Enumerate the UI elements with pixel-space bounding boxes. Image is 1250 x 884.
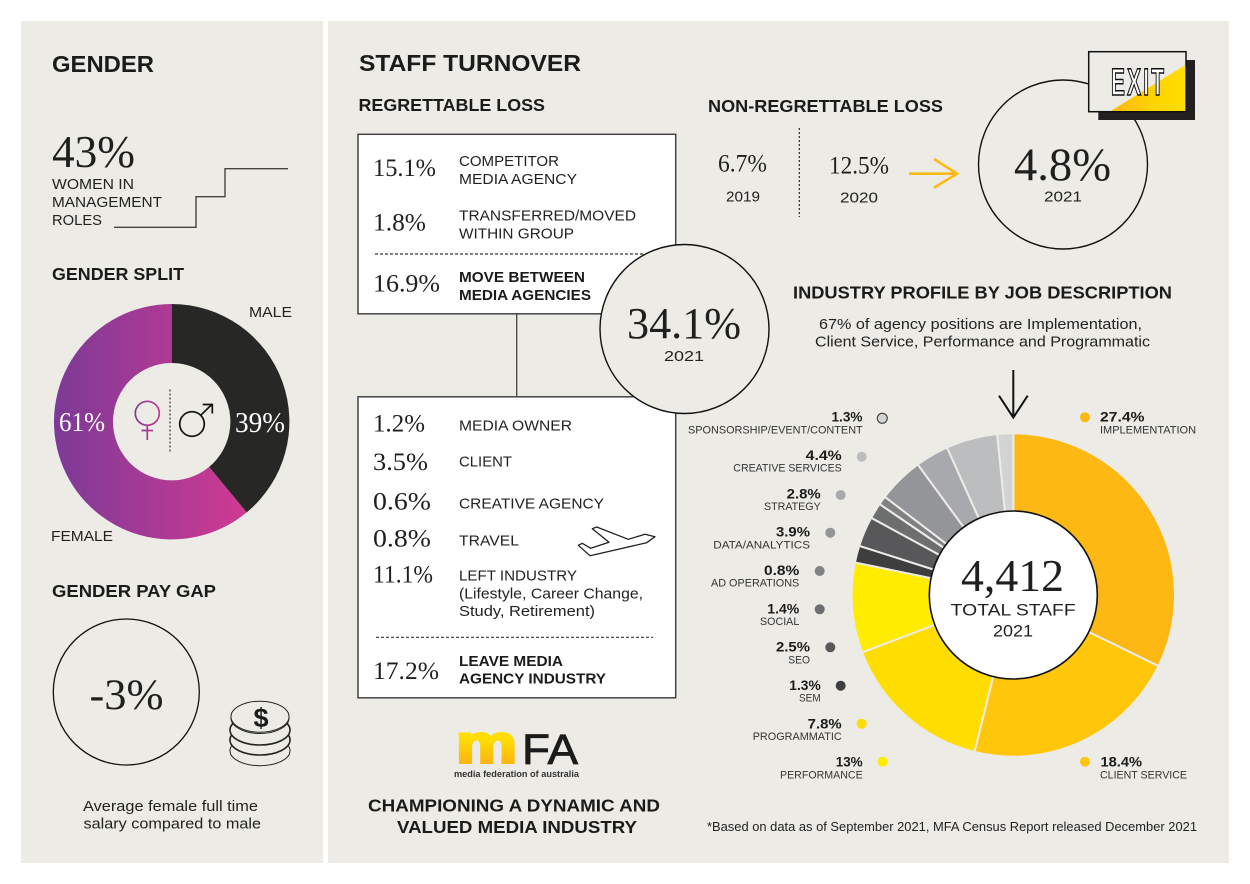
slice: strategy [918,448,1013,595]
stat: women in management: ROLES [52,212,102,229]
slice: ad operations [880,497,1013,595]
stat circle: 34.1% 2021: 2021 [664,348,704,365]
box: leave media agency industry: 0.8% [373,526,431,553]
legend: social: SOCIAL [760,616,799,628]
text: industry profile description [815,316,1151,350]
icon: exit sign: EXIT [1111,62,1166,104]
slice: programmatic [862,595,1013,752]
box: leave media agency industry: 1.2% [373,410,425,438]
slice: female 61% [54,304,247,539]
box: leave media agency industry: (Lifestyle, Career Change, [459,586,643,603]
icon: exit sign [1089,52,1195,120]
legend: social: 1.4% [767,600,800,616]
legend: ad operations: AD OPERATIONS [711,578,799,590]
legend: seo: SEO [788,654,810,666]
stat: 2020: 12.5% [829,152,889,179]
slice: seo [859,518,1013,595]
box: leave media agency industry: LEAVE MEDIA [459,653,563,670]
box: moves between agencies: COMPETITOR [459,153,559,170]
box: moves between agencies: WITHIN GROUP [459,226,574,242]
footnote: *Based on data as of September 2021, MFA Census Report released December 2021 [707,820,1197,834]
stat: women in management: MANAGEMENT [52,194,162,211]
legend: client service: 18.4% [1100,754,1143,770]
heading: gender pay gap: GENDER PAY GAP [52,581,216,601]
legend: sponsorship: 1.3% [832,409,863,425]
stat circle: 34.1% 2021: 34.1% [627,299,741,348]
logo: media federation of australia: m [456,714,517,774]
icon: rising steps line [114,169,288,227]
legend: seo [776,639,835,666]
stat: women in management [52,126,162,229]
panel: gender [21,21,323,863]
text: pay gap description: salary compared to male [84,816,261,832]
text: industry profile description: Client Service, Performance and Programmatic [815,334,1151,350]
stat: 2019: 2019 [726,189,760,206]
box: leave media agency industry: CREATIVE AGENCY [459,495,604,512]
legend: ad operations: 0.8% [764,562,800,578]
box: leave media agency industry: CLIENT [459,454,512,471]
donut chart: gender split [54,304,289,539]
donut chart: job description [852,433,1175,757]
legend: data and analytics: 3.9% [776,524,811,540]
box: moves between agencies: 16.9% [373,270,440,298]
legend: implementation: IMPLEMENTATION [1100,424,1196,436]
slice: creative services [947,434,1013,595]
heading: staff turnover: STAFF TURNOVER [359,50,581,76]
legend: creative services [733,447,867,475]
stat: women in management: WOMEN IN [52,176,134,193]
box: leave media agency industry: LEFT INDUSTRY [459,568,577,585]
stat: women in management: 43% [52,126,135,177]
box: moves between agencies: MEDIA AGENCIES [459,287,591,304]
legend: seo: 2.5% [776,639,811,655]
stat circle: 34.1% 2021 [600,244,769,414]
legend: implementation [1080,409,1196,436]
stat: 2020: 2020 [840,190,878,207]
legend: ad operations [711,562,825,590]
arrow: to 2021 [909,159,957,188]
box: leave media agency industry: AGENCY INDUSTRY [459,670,606,688]
stat: 2019: 6.7% [718,150,767,178]
text: industry profile description: 67% of agency positions are Implementation, [819,316,1142,333]
legend: performance: PERFORMANCE [780,769,863,781]
text: pay gap description [83,798,261,832]
legend: client service [1080,754,1187,781]
chart centre: total staff: 2021 [993,622,1033,641]
slice: male 39% [172,304,289,512]
legend: sponsorship: SPONSORSHIP/EVENT/CONTENT [688,424,863,436]
icon: female symbol [135,401,159,440]
box: moves between agencies: 15.1% [373,155,436,182]
legend: data and analytics [713,524,835,551]
box: moves between agencies: TRANSFERRED/MOVED [459,208,636,224]
box: moves between agencies [358,134,676,314]
legend: sem [789,677,846,705]
heading: regrettable loss: REGRETTABLE LOSS [358,95,545,115]
box: leave media agency industry: MEDIA OWNER [459,418,572,435]
slice: sem [855,546,1013,595]
box: moves between agencies: MEDIA AGENCY [459,171,577,188]
heading: non-regrettable loss: NON-REGRETTABLE LOSS [708,96,943,116]
legend: sem: SEM [799,693,821,705]
stat: 2019 [718,150,767,206]
legend: data and analytics: DATA/ANALYTICS [713,539,810,551]
box: leave media agency industry: 11.1% [373,562,433,588]
legend: sponsorship [688,409,887,436]
icon: male symbol [180,404,212,436]
label: male: MALE [249,304,292,321]
box: leave media agency industry: Study, Retirement) [459,603,595,620]
legend: sem: 1.3% [789,677,821,693]
legend: strategy [764,485,846,513]
legend: programmatic: 7.8% [808,715,842,731]
icon: coin stack: $ [253,703,269,733]
arrow: down to chart [999,370,1028,418]
slice: social [871,504,1013,595]
legend: performance: 13% [836,754,863,770]
heading: gender split: GENDER SPLIT [52,264,184,284]
label: 61%: 61% [59,407,105,437]
stat circle: pay gap [53,619,199,765]
logo: media federation of australia [454,714,580,780]
box: leave media agency industry: 0.6% [373,488,431,515]
logo: media federation of australia: FA [522,726,578,774]
slice: data and analytics [885,464,1013,595]
tagline: VALUED MEDIA INDUSTRY [397,817,637,837]
connector line [516,314,518,397]
legend: client service: CLIENT SERVICE [1100,769,1187,781]
chart centre: total staff: TOTAL STAFF [951,601,1076,620]
box: leave media agency industry: TRAVEL [459,532,519,549]
panel: staff turnover [328,21,1229,863]
box: leave media agency industry [358,397,676,698]
heading: gender: GENDER [52,51,154,77]
legend: programmatic [753,715,867,743]
box: moves between agencies: MOVE BETWEEN [459,269,585,286]
slice: implementation [1013,433,1175,666]
icon: airplane [578,527,655,556]
icon: coin stack [230,701,290,766]
legend: social [760,600,825,628]
tagline: CHAMPIONING A DYNAMIC AND [368,796,660,816]
legend: creative services: CREATIVE SERVICES [733,463,842,475]
chart centre: total staff [929,511,1097,679]
label: 39%: 39% [235,408,285,439]
box: moves between agencies: 1.8% [373,210,426,236]
stat circle: 4.8% 2021 [978,80,1148,249]
box: leave media agency industry: 17.2% [373,658,439,685]
label: female: FEMALE [51,528,113,545]
text: pay gap description: Average female full time [83,798,258,815]
slice: sponsorship [997,433,1013,595]
heading: industry profile: INDUSTRY PROFILE BY JOB DESCRIPTION [793,282,1172,302]
legend: strategy: 2.8% [787,485,821,501]
legend: strategy: STRATEGY [764,501,821,513]
chart centre: total staff: 4,412 [961,550,1064,601]
stat circle: 4.8% 2021: 2021 [1044,189,1082,206]
stat: 2020 [829,152,889,207]
legend: performance [780,754,888,781]
stat circle: 4.8% 2021: 4.8% [1014,139,1111,191]
slice: performance [852,562,1013,652]
logo: media federation of australia: media federation of australia [454,769,580,780]
box: leave media agency industry: 3.5% [373,449,428,476]
stat circle: pay gap: -3% [90,672,164,719]
slice: client service [974,595,1158,757]
tagline [368,796,660,837]
legend: programmatic: PROGRAMMATIC [753,731,842,743]
legend: creative services: 4.4% [806,447,842,463]
legend: implementation: 27.4% [1100,409,1145,425]
